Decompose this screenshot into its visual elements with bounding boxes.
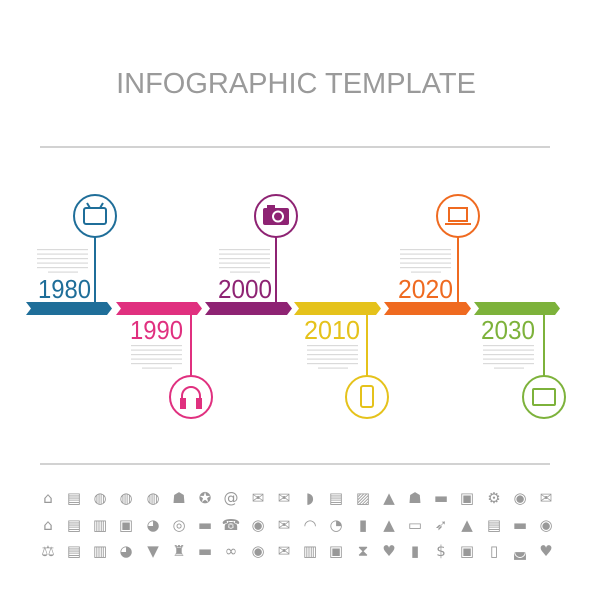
icon grid: ♥ [539, 542, 553, 560]
icon grid: ✉ [252, 489, 264, 507]
icon grid: ◍ [146, 489, 160, 507]
icon grid: ∞ [225, 542, 237, 560]
milestone 2000 [255, 195, 297, 302]
icon grid: ▤ [487, 516, 501, 534]
icon grid: ▥ [303, 542, 317, 560]
icon grid: ▤ [67, 516, 81, 534]
icon grid: ◉ [513, 489, 527, 507]
icon grid: ▣ [329, 542, 343, 560]
text: 2010 [304, 315, 360, 345]
text block 1980 [37, 249, 88, 273]
icon grid: ▲ [383, 516, 395, 534]
icon grid: ◉ [251, 542, 265, 560]
text block 2030 [483, 345, 534, 369]
icon grid: ⚙ [487, 489, 501, 507]
icon grid: ◍ [93, 489, 107, 507]
icon grid: ◕ [119, 542, 133, 560]
icon grid: ✉ [540, 489, 552, 507]
icon grid: ➶ [435, 516, 447, 534]
icon grid: ▬ [434, 489, 448, 507]
icon grid: ◍ [119, 489, 133, 507]
text block 2010 [307, 345, 358, 369]
milestone 2020 [437, 195, 479, 302]
icon grid: ▬ [198, 542, 212, 560]
text: 2020 [398, 274, 453, 304]
icon: laptop [449, 208, 467, 221]
icon grid: ▭ [408, 516, 422, 534]
icon grid: ◛ [513, 542, 527, 560]
milestone 2030 [523, 315, 565, 418]
title: INFOGRAPHIC TEMPLATE [116, 68, 476, 100]
icon grid: @ [224, 489, 238, 507]
icon grid: ▥ [93, 542, 107, 560]
icon grid: ◗ [306, 489, 314, 507]
icon: phone [361, 386, 373, 407]
icon grid: ▤ [67, 542, 81, 560]
icon grid: ▲ [461, 516, 473, 534]
icon grid: ▲ [383, 489, 395, 507]
text: 2030 [481, 315, 535, 345]
milestone 1980 [74, 195, 116, 302]
text block 2020 [400, 249, 451, 273]
icon grid: ✉ [278, 542, 290, 560]
icon grid: ◉ [251, 516, 265, 534]
icon grid: ◠ [303, 516, 317, 534]
text: 1980 [38, 274, 91, 304]
icon grid: ▼ [147, 542, 159, 560]
icon grid: ▣ [119, 516, 133, 534]
icon grid: ◕ [146, 516, 160, 534]
icon grid: ✉ [278, 489, 290, 507]
icon: tv [84, 208, 106, 224]
icon grid: ⌂ [43, 489, 53, 507]
icon: tablet [533, 389, 555, 405]
icon grid: ▥ [93, 516, 107, 534]
text: 2000 [218, 274, 272, 304]
icon grid: ♜ [172, 542, 186, 560]
icon grid: ◉ [539, 516, 553, 534]
icon grid: ☎ [222, 516, 240, 534]
text: 1990 [130, 315, 183, 345]
icon grid: ✉ [278, 516, 290, 534]
text block 2000 [219, 249, 270, 273]
icon grid: ▯ [490, 542, 498, 560]
icon grid: ▨ [356, 489, 370, 507]
icon grid: ☗ [172, 489, 186, 507]
icon grid: ◎ [172, 516, 186, 534]
icon grid: ⧗ [358, 542, 368, 560]
icon grid: ▮ [411, 542, 419, 560]
icon: camera [264, 209, 288, 224]
icon grid: ◔ [329, 516, 343, 534]
icon grid: ▤ [329, 489, 343, 507]
timeline arrows [26, 302, 560, 315]
icon grid: ▬ [513, 516, 527, 534]
icon grid: ▮ [359, 516, 367, 534]
icon grid: ⌂ [43, 516, 53, 534]
icon grid: ✪ [199, 489, 211, 507]
icon grid [41, 489, 553, 560]
milestone 1990 [170, 315, 212, 418]
icon grid: ♥ [382, 542, 396, 560]
icon: headphones [182, 387, 200, 402]
icon grid: $ [436, 542, 446, 560]
icon grid: ▣ [460, 489, 474, 507]
icon grid: ⚖ [41, 542, 55, 560]
icon grid: ☗ [408, 489, 422, 507]
milestone 2010 [346, 315, 388, 418]
text block 1990 [131, 345, 182, 369]
icon grid: ▤ [67, 489, 81, 507]
icon grid: ▬ [198, 516, 212, 534]
icon grid: ▣ [460, 542, 474, 560]
